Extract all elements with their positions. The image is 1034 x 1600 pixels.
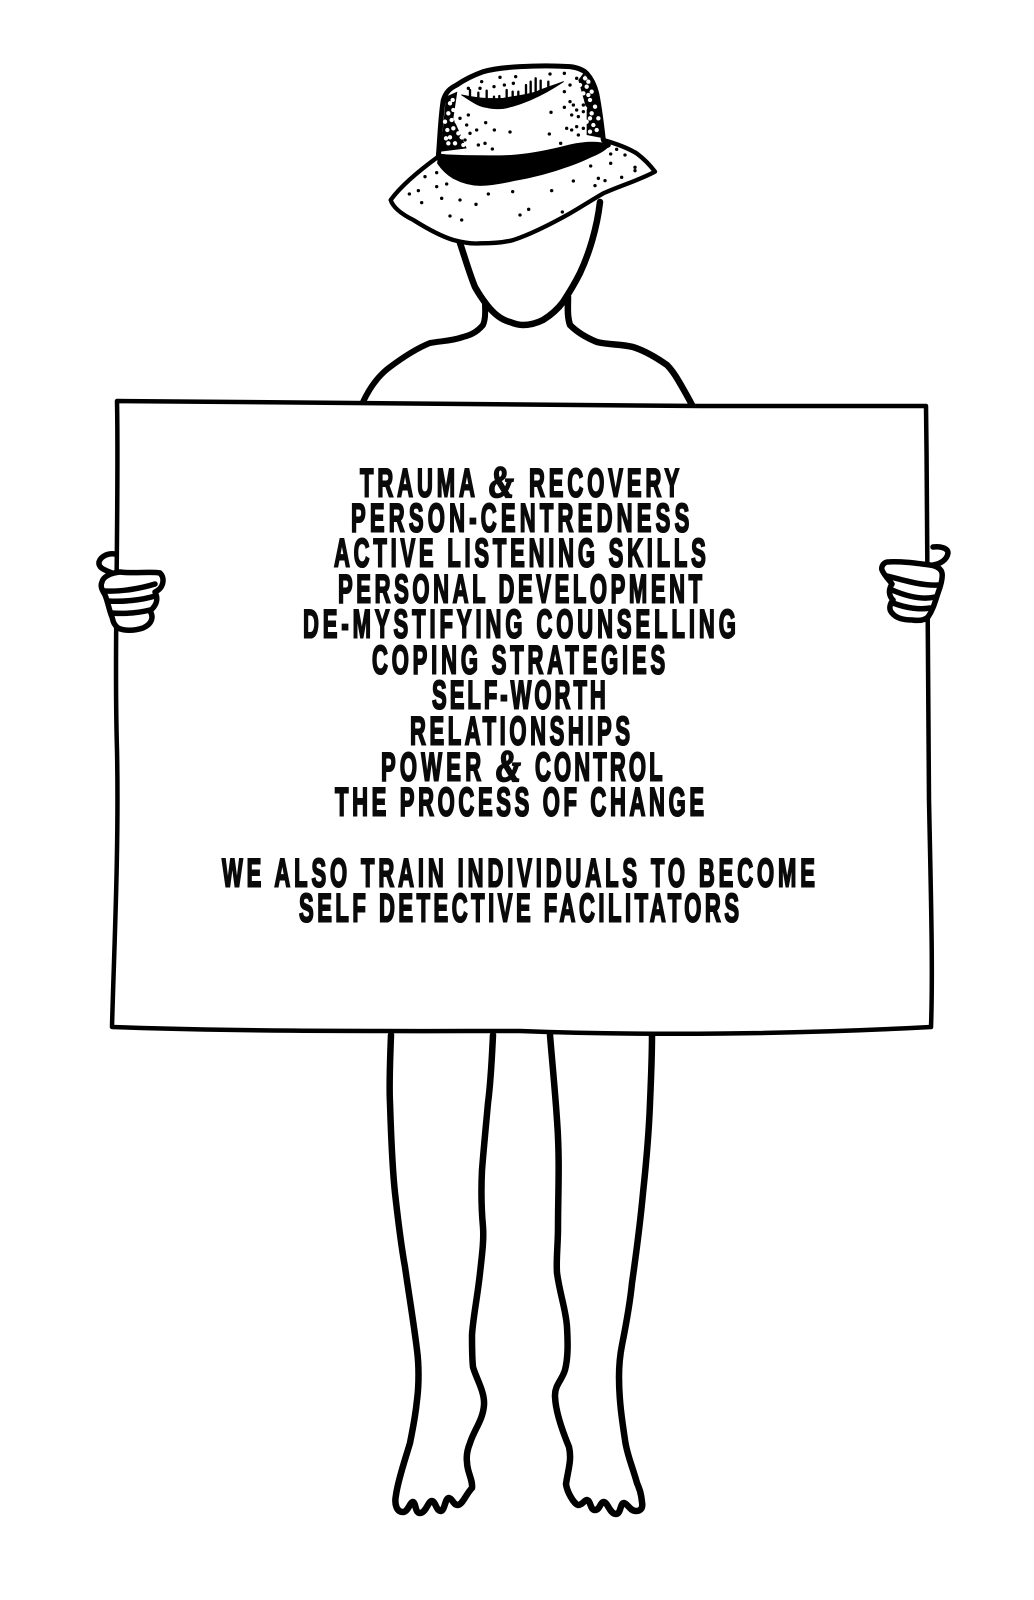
topic: trauma and recovery	[360, 459, 679, 507]
figure: head and shoulders	[363, 202, 692, 405]
topic: de-mystifying counselling: DE-MYSTIFYING COUNSELLING	[303, 602, 736, 646]
hat crown dent	[462, 82, 563, 109]
hat dent hatching	[470, 78, 548, 104]
topic: trauma and recovery: TRAUMA	[360, 461, 475, 505]
hat band	[438, 142, 609, 185]
topic: self-worth: SELF-WORTH	[432, 673, 606, 717]
topic: power and control: CONTROL	[535, 745, 663, 789]
right hand	[882, 547, 948, 620]
hat right shading	[578, 73, 604, 138]
hat stipple on crown	[460, 73, 583, 149]
topic: power and control: POWER	[381, 745, 481, 789]
topic: power and control: &	[496, 743, 521, 791]
closing statement line 1: WE ALSO TRAIN INDIVIDUALS TO BECOME	[222, 851, 815, 895]
hat left shading	[441, 92, 467, 152]
hat crown	[438, 66, 608, 158]
hat shading highlights	[445, 78, 598, 145]
panel: sign board	[112, 401, 932, 1034]
topic: active listening skills: ACTIVE LISTENING SKILLS	[334, 531, 706, 575]
closing statement line 2: SELF DETECTIVE FACILITATORS	[299, 886, 739, 930]
topic: trauma and recovery: &	[489, 459, 514, 507]
topic: coping strategies: COPING STRATEGIES	[372, 638, 665, 682]
topic: relationships: RELATIONSHIPS	[410, 709, 630, 753]
hat brim	[391, 140, 655, 244]
topic: power and control	[381, 743, 663, 791]
figure: left leg and foot	[390, 1035, 493, 1513]
figure: right leg and foot	[550, 1035, 652, 1514]
hat stipple on brim	[409, 149, 635, 220]
topic: personal development: PERSONAL DEVELOPMENT	[338, 567, 702, 611]
topic: the process of change: THE PROCESS OF CHANGE	[335, 780, 704, 824]
topic: trauma and recovery: RECOVERY	[529, 461, 679, 505]
icon: hat	[391, 66, 655, 244]
left hand	[99, 554, 163, 630]
topic: person-centredness: PERSON-CENTREDNESS	[351, 496, 689, 540]
text block: training topics	[222, 459, 815, 930]
